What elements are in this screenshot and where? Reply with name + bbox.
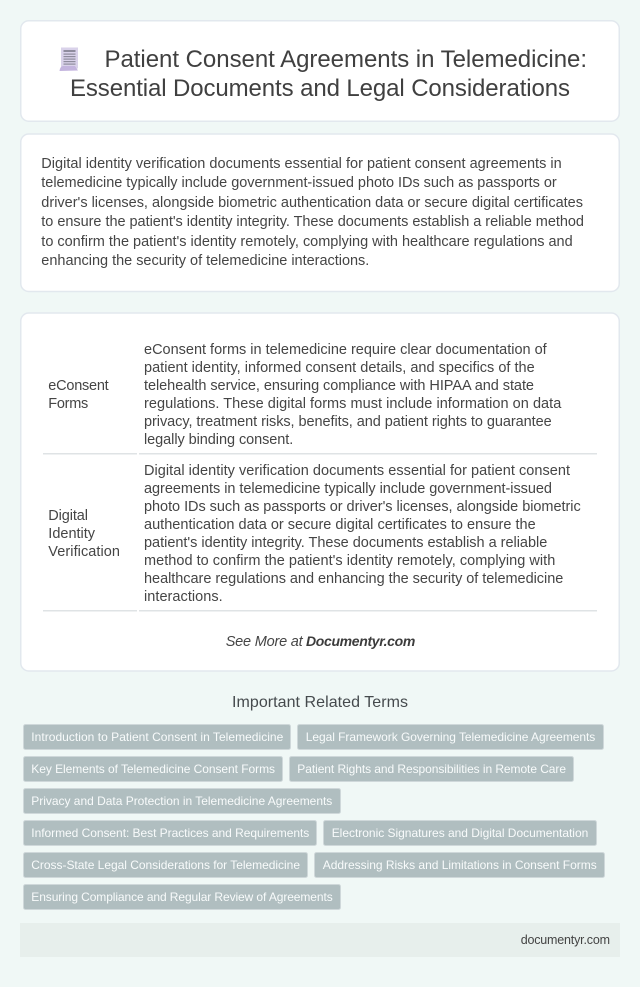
summary text block: telemedicine typically include government-issued photo IDs such as passports or: [41, 175, 557, 191]
title: Patient Consent Agreements in Telemedicine:: [104, 46, 587, 73]
row text: Digital Identity Verification description: patient's identity integrity. These documents establish a reliable: [144, 535, 547, 551]
row label: Digital Identity Verification: Identity: [48, 526, 96, 542]
heading: important related terms: Important Related Terms: [232, 694, 408, 711]
tag: [24, 852, 308, 878]
row text: eConsent Forms description: legally binding consent.: [144, 432, 293, 448]
tag list: related terms: [24, 724, 604, 910]
row text: Digital Identity Verification description: Digital identity verification documents essential for patient consent: [144, 463, 570, 479]
row label: Digital Identity Verification: [48, 508, 120, 560]
footer: [20, 923, 620, 957]
summary text block: to confirm the patient's identity remotely, complying with healthcare regulations and: [41, 234, 573, 250]
row text: eConsent Forms description: privacy, treatment risks, benefits, and patient rights to guarantee: [144, 414, 552, 430]
row text: Digital Identity Verification description: authentication data or secure digital certificates to ensure the: [144, 517, 536, 533]
row label: Digital Identity Verification: Digital: [48, 508, 88, 524]
row label: eConsent Forms: [48, 378, 109, 412]
tag: Electronic Signatures and Digital Documentation: [332, 826, 588, 840]
table row: eConsent Forms: [43, 342, 597, 454]
row text: eConsent Forms description: telehealth service, ensuring compliance with HIPAA and state: [144, 378, 534, 394]
footer: documentyr.com: [521, 933, 610, 947]
tag: [24, 820, 316, 846]
row text: eConsent Forms description: [144, 342, 562, 448]
tag: Privacy and Data Protection in Telemedicine Agreements: [31, 794, 332, 808]
tag: [24, 884, 340, 910]
table row: Digital Identity Verification: [43, 463, 597, 612]
tag: [314, 852, 604, 878]
panel: title header: [21, 21, 619, 121]
summary text block: driver's licenses, alongside biometric authentication data or secure digital certificates: [41, 195, 583, 211]
see more link: Documentyr.com: [306, 633, 415, 649]
tag: Ensuring Compliance and Regular Review of Agreements: [31, 890, 333, 904]
row text: Digital Identity Verification description: method to confirm the patient's identity remotely, complying with: [144, 553, 555, 569]
row text: eConsent Forms description: patient identity, informed consent details, and specifics of the: [144, 360, 535, 376]
tag: [24, 788, 340, 814]
see more link: See More at: [226, 634, 304, 650]
row text: Digital Identity Verification description: photo IDs such as passports or driver's licenses, alongside biometric: [144, 499, 581, 515]
row label: Digital Identity Verification: Verification: [48, 544, 120, 560]
tag: [24, 756, 282, 782]
panel: summary: [21, 134, 619, 292]
tag: Informed Consent: Best Practices and Requirements: [31, 826, 309, 840]
row label: eConsent Forms: eConsent: [48, 378, 109, 394]
tag: [24, 724, 290, 750]
title: [70, 46, 587, 102]
row text: Digital Identity Verification description: agreements in telemedicine typically include government-issued: [144, 481, 552, 497]
tag: Legal Framework Governing Telemedicine Agreements: [306, 730, 595, 744]
icon: scroll document: [60, 48, 78, 71]
row text: eConsent Forms description: eConsent forms in telemedicine require clear documentation of: [144, 342, 548, 358]
row text: Digital Identity Verification description: healthcare regulations and enhancing the security of telemedicine: [144, 571, 563, 587]
see more link: [226, 633, 415, 650]
tag: [324, 820, 596, 846]
row text: Digital Identity Verification description: [144, 463, 581, 605]
tag: Addressing Risks and Limitations in Consent Forms: [323, 858, 597, 872]
tag: Patient Rights and Responsibilities in Remote Care: [297, 762, 566, 776]
panel: document table: [21, 313, 619, 671]
tag: Key Elements of Telemedicine Consent Forms: [31, 762, 275, 776]
tag: Cross-State Legal Considerations for Telemedicine: [31, 858, 300, 872]
summary text block: enhancing the security of telemedicine interactions.: [41, 253, 369, 269]
summary text block: Digital identity verification documents essential for patient consent agreements in: [41, 156, 562, 172]
summary text block: [41, 156, 584, 269]
tag: Introduction to Patient Consent in Telemedicine: [31, 730, 284, 744]
title: Essential Documents and Legal Considerations: [70, 75, 570, 102]
tag: [290, 756, 574, 782]
row text: Digital Identity Verification description: interactions.: [144, 589, 223, 605]
summary text block: to ensure the patient's identity integrity. These documents establish a reliable method: [41, 214, 584, 230]
row text: eConsent Forms description: regulations. These digital forms must include information on data: [144, 396, 562, 412]
row label: eConsent Forms: Forms: [48, 396, 88, 412]
tag: [298, 724, 604, 750]
